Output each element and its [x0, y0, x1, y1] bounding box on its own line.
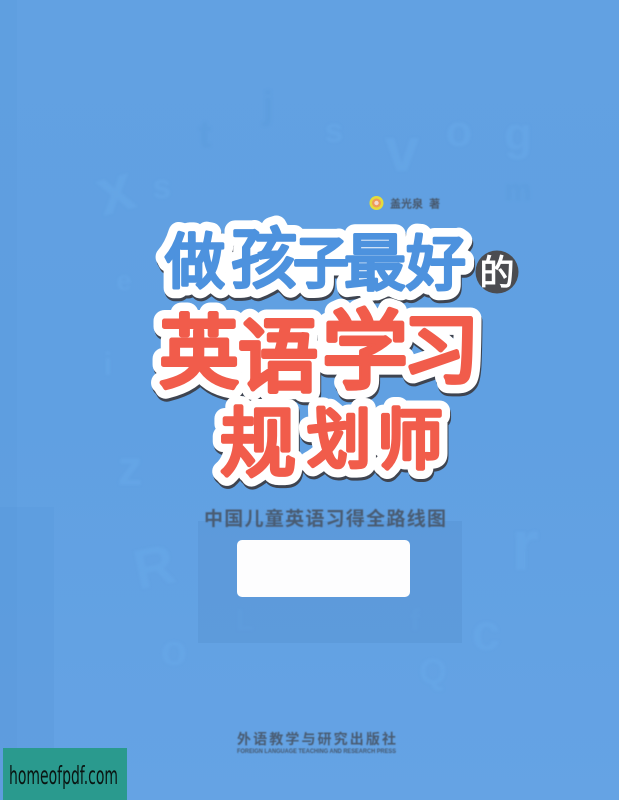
- title line 2 shadow: 语: [239, 316, 319, 405]
- title line 3 shadow: 规: [221, 405, 297, 490]
- title line 2 letters: 英: [159, 309, 239, 398]
- publisher english name: FOREIGN LANGUAGE TEACHING AND RESEARCH PRESS: [237, 748, 397, 755]
- faint background letters: [87, 85, 539, 692]
- title line 1 shadow: 最: [345, 233, 407, 302]
- faint background letters: x: [87, 148, 142, 230]
- title line 3 letters: [220, 402, 443, 487]
- title line 2 letters: [159, 304, 479, 402]
- title line 3: [220, 402, 444, 490]
- title line 1 letters: 孩: [231, 222, 297, 296]
- title line 3 outline: [220, 402, 443, 487]
- title line 1 letters: [165, 222, 466, 299]
- faint background letters: f: [410, 604, 421, 637]
- title line 2 shadow: 学: [323, 307, 409, 403]
- title line 1 shadow: 孩: [232, 225, 298, 299]
- title line 1 outline: 子: [293, 232, 349, 295]
- faint background letters: o: [161, 626, 187, 675]
- title line 1 letters: 最: [344, 230, 406, 299]
- title line 1 outline: 孩: [231, 222, 297, 296]
- title line 2 outline: 语: [238, 313, 318, 402]
- title line 1 letters: 好: [406, 231, 466, 298]
- title line 3 outline: 师: [377, 403, 443, 477]
- title line 1 letters: 子: [293, 232, 349, 295]
- title line 2: [159, 304, 480, 405]
- author name: 盖光泉 著: [390, 196, 440, 210]
- title line 3 letters: 师: [377, 403, 443, 477]
- faint background letters: t: [199, 114, 212, 156]
- title line 1 shadow: [166, 225, 467, 302]
- title line 2 letters: 语: [238, 313, 318, 402]
- faint background letters: m: [505, 174, 531, 207]
- faint background letters: j: [262, 85, 273, 127]
- white label: [237, 540, 410, 597]
- title line 2 outline: 英: [159, 309, 239, 398]
- publisher name: 外语教学与研究出版社: [237, 731, 396, 747]
- title line 1 letters: 做: [165, 229, 225, 296]
- title line 1: [165, 222, 467, 302]
- title line 3 shadow: 师: [378, 406, 444, 480]
- title line 1 outline: [165, 222, 466, 299]
- title line 3 shadow: [221, 405, 444, 490]
- faint background letters: s: [153, 168, 171, 206]
- faint background letters: e: [116, 265, 132, 296]
- title line 2 shadow: 英: [160, 312, 240, 401]
- title line 2 outline: 学: [322, 304, 408, 400]
- watermark badge: [3, 748, 127, 800]
- title line 1 shadow: 子: [294, 235, 350, 298]
- subtitle: 中国儿童英语习得全路线图: [204, 507, 446, 530]
- title line 2 letters: 学: [322, 304, 408, 400]
- faint background letters: L: [236, 604, 254, 637]
- icon: author bullet: [370, 196, 384, 210]
- faint background letters: s: [325, 112, 343, 150]
- title line 2 shadow: [160, 307, 480, 405]
- faint background letters: R: [128, 531, 180, 602]
- faint background letters: Q: [419, 651, 447, 692]
- title line 3 outline: 划: [307, 404, 371, 476]
- darker panel behind label: [198, 521, 462, 643]
- title line 3 letters: 规: [220, 402, 296, 487]
- faint background letters: i: [104, 346, 112, 382]
- title line 1 outline: 最: [344, 230, 406, 299]
- title line 2 outline: 习: [403, 309, 479, 394]
- title line 1 outline: 好: [406, 231, 466, 298]
- watermark badge: homeofpdf.com: [9, 761, 118, 790]
- title line 3 letters: 划: [307, 404, 371, 476]
- title line 2 letters: 习: [403, 309, 479, 394]
- title line 1 shadow: 好: [407, 234, 467, 301]
- title line 1 shadow: 做: [166, 232, 226, 299]
- faint background letters: v: [385, 116, 420, 185]
- faint background letters: g: [504, 108, 532, 160]
- faint background letters: r: [511, 506, 539, 586]
- title line 1 outline: 做: [165, 229, 225, 296]
- title line 2 outline: [159, 304, 479, 402]
- faint background letters: o: [446, 107, 472, 156]
- title line 3 outline: 规: [220, 402, 296, 487]
- title line 2 shadow: 习: [404, 312, 480, 397]
- badge: 的: 的: [479, 254, 515, 293]
- faint background letters: z: [118, 440, 142, 496]
- title line 3 shadow: 划: [308, 407, 372, 479]
- faint background letters: c: [472, 604, 500, 662]
